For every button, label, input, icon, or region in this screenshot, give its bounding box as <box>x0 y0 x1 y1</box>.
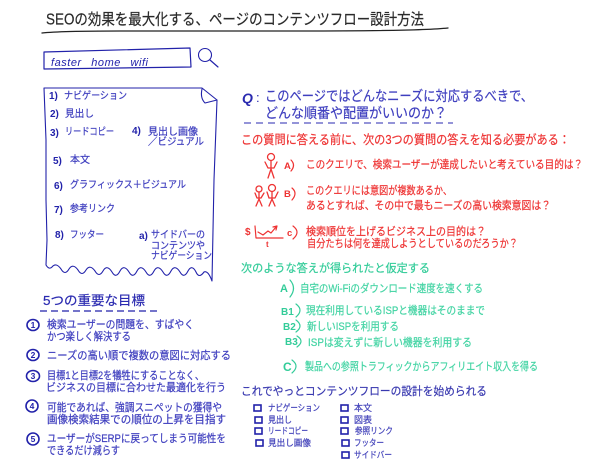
answer letters: B3 <box>285 337 298 348</box>
answer texts: 新しいISPを利用する <box>307 320 399 333</box>
wireframe numbers: 3) <box>50 128 59 139</box>
icon: growth chart: $ <box>245 227 251 238</box>
question texts <box>306 157 583 250</box>
panel: prerequisite questions <box>241 132 583 250</box>
question texts: このクエリには意図が複数あるか、 <box>306 183 452 197</box>
panel: five goals: 4 <box>30 401 35 411</box>
answer letters: B1 <box>281 307 294 318</box>
page corner fold <box>201 89 217 103</box>
wireframe labels: ／ビジュアル <box>148 136 204 148</box>
wireframe labels: コンテンツや <box>151 240 205 252</box>
checklist items <box>268 402 393 460</box>
question heading: どんな順番や配置がいいのか？ <box>265 105 447 121</box>
question heading <box>242 88 533 123</box>
answer letters <box>280 280 301 374</box>
answer texts: 自宅のWi-Fiのダウンロード速度を速くする <box>300 281 483 295</box>
wireframe numbers: a) <box>139 231 148 242</box>
red heading: この質問に答える前に、次の3つの質問の答えを知る必要がある： <box>241 132 570 147</box>
checklist items: 見出し画像 <box>268 437 311 448</box>
checkboxes <box>254 405 349 458</box>
wireframe labels: ナビゲーション <box>151 250 212 262</box>
question texts: 検索順位を上げるビジネス上の目的は？ <box>306 224 486 238</box>
wireframe numbers: 6) <box>54 181 63 192</box>
question letters: B <box>284 189 291 200</box>
goals text: 画像検索結果での順位の上昇を目指す <box>47 412 226 426</box>
wireframe labels: 見出し <box>65 108 94 120</box>
goals text: 目標1と目標2を犠牲にすることなく、 <box>47 368 204 382</box>
checklist items: 見出し <box>268 414 292 425</box>
wireframe labels <box>64 90 212 262</box>
answer letters: A <box>280 283 288 295</box>
checklist items: 図表 <box>354 415 372 425</box>
wireframe numbers: 4) <box>132 126 141 137</box>
goals text: 検索ユーザーの問題を、すばやく <box>47 317 194 331</box>
checklist items: 本文 <box>354 402 372 413</box>
question texts: 自分たちは何を達成しようとしているのだろうか？ <box>307 237 518 250</box>
question letters: c <box>287 228 292 239</box>
icon: two people <box>255 184 278 206</box>
wireframe labels: フッター <box>70 229 104 241</box>
question letters <box>284 160 297 239</box>
icon: growth chart <box>245 226 283 249</box>
checklist items: リードコピー <box>268 426 308 436</box>
wireframe numbers: 1) <box>49 91 58 102</box>
checklist items: サイドバー <box>354 450 392 460</box>
wireframe labels: グラフィックス＋ビジュアル <box>70 178 186 191</box>
wireframe labels: リードコピー <box>65 126 114 138</box>
green heading: 次のような答えが得られたと仮定する <box>241 261 430 275</box>
goals text: かつ楽しく解決する <box>47 329 131 343</box>
question heading: : <box>256 90 260 105</box>
answer letters: C <box>283 360 292 374</box>
goals text: 可能であれば、強調スニペットの獲得や <box>47 400 222 414</box>
panel: five goals: 5 <box>31 434 36 444</box>
goals text: ニーズの高い順で複数の意図に対応する <box>47 348 231 362</box>
goals text: ユーザーがSERPに戻ってしまう可能性を <box>47 431 226 445</box>
panel: page wireframe <box>44 88 217 281</box>
goals text: できるだけ減らす <box>47 443 120 457</box>
wireframe labels: 参考リンク <box>70 203 115 215</box>
checklist items: ナビゲーション <box>268 402 320 413</box>
icon: magnifying glass <box>198 48 218 67</box>
wireframe labels: ナビゲーション <box>64 90 127 102</box>
search box: faster home wifi <box>51 57 149 69</box>
answer texts: ISPは変えずに新しい機器を利用する <box>308 336 472 349</box>
wireframe labels: 本文 <box>70 153 90 166</box>
question heading: Q <box>242 90 253 106</box>
goal number icons <box>26 320 40 445</box>
panel: five goals: 2 <box>31 350 36 360</box>
page outline <box>44 88 217 281</box>
panel: five goals: 3 <box>31 371 36 381</box>
wireframe numbers: 2) <box>50 109 59 120</box>
icon: growth chart: t <box>266 240 269 249</box>
search box <box>44 48 191 69</box>
goals text: ビジネスの目標に合わせた最適化を行う <box>46 380 226 394</box>
title: SEOの効果を最大化する、ページのコンテンツフロー設計方法 <box>46 10 424 28</box>
answer texts <box>300 281 538 373</box>
checklist items: フッター <box>354 438 384 448</box>
answer texts: 製品への参照トラフィックからアフィリエイト収入を得る <box>305 359 538 373</box>
panel: five goals <box>26 293 231 457</box>
panel: five goals: 1 <box>31 320 36 330</box>
panel: content flow checklist <box>241 384 487 460</box>
checklist items: 参照リンク <box>355 425 393 436</box>
goals text <box>46 317 231 457</box>
question letters: A <box>284 161 291 172</box>
wireframe numbers: 8) <box>55 230 64 241</box>
question texts: あるとすれば、その中で最もニーズの高い検索意図は？ <box>306 198 551 212</box>
wireframe numbers: 5) <box>53 156 62 167</box>
answer texts: 現在利用しているISPと機器はそのままで <box>306 304 485 317</box>
goals heading <box>40 293 157 311</box>
question heading: このページではどんなニーズに対応するべきで、 <box>265 88 533 104</box>
wireframe labels: サイドバーの <box>151 229 205 241</box>
wireframe numbers <box>49 91 148 242</box>
goals heading: 5つの重要な目標 <box>43 293 145 308</box>
wireframe numbers: 7) <box>54 205 63 216</box>
checklist heading: これでやっとコンテンツフローの設計を始められる <box>241 384 487 398</box>
wireframe labels: 見出し画像 <box>148 125 198 138</box>
icon: single person <box>265 154 277 178</box>
answer letters: B2 <box>283 322 296 333</box>
panel: assumed answers <box>241 261 538 374</box>
